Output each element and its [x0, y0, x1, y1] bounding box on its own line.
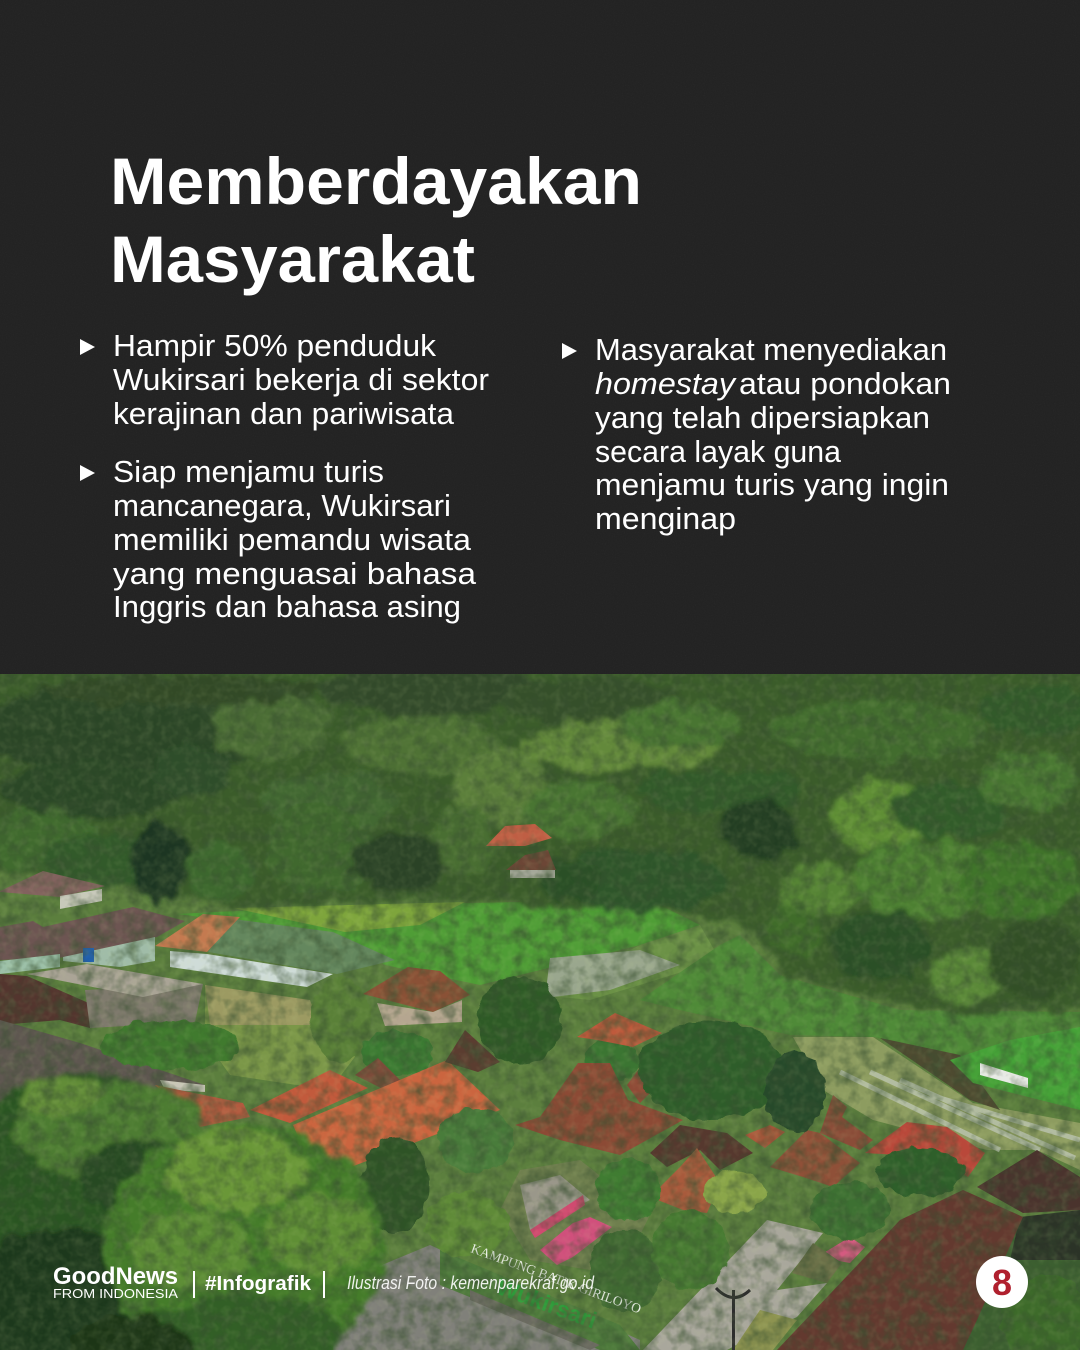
foreground tree canopy: [0, 1070, 385, 1350]
courtyard, walkway and lawns: [333, 1160, 865, 1350]
footer: GoodNews from Indonesia logo: FROM INDONESIA: [53, 1287, 179, 1301]
bullet: homestay: [562, 332, 951, 536]
bullet: tour guides: yang menguasai bahasa: [113, 556, 477, 591]
bullet: homestay: Masyarakat menyediakan: [595, 332, 947, 367]
title: [110, 144, 642, 296]
title: Masyarakat: [110, 222, 475, 296]
title: Memberdayakan: [110, 144, 642, 218]
sign and white banner in field: [980, 1063, 1028, 1088]
bullet: tour guides: Siap menjamu turis: [113, 454, 384, 489]
photo credit: Ilustrasi Foto : kemenparekraf.go.id: [347, 1273, 595, 1293]
bullet: homestay: menginap: [595, 501, 736, 536]
bullet: homestay: yang telah dipersiapkan: [595, 400, 930, 435]
fields and ground: [0, 869, 1080, 1350]
clay-tiled roofs: [155, 967, 985, 1213]
bullet: homestay: menjamu turis yang ingin: [595, 467, 949, 502]
sign lettering: KAMPUNG BATIK GIRILOYO: [469, 1241, 643, 1316]
green-roofed school building: [155, 914, 395, 987]
bullet: homestay: homestay: [595, 366, 738, 401]
bullet: tour guides: [80, 454, 477, 624]
bullet: employment share: Hampir 50% penduduk: [113, 328, 437, 363]
lamp post: [716, 1288, 750, 1350]
mid-ground trees and plants: [100, 976, 640, 1080]
bullet: employment share: kerajinan dan pariwisata: [113, 396, 455, 431]
footer: GoodNews from Indonesia logo: GoodNews: [53, 1263, 178, 1290]
page number badge: 8: [992, 1262, 1012, 1303]
hillside huts: [486, 824, 556, 878]
bullet: tour guides: mancanegara, Wukirsari: [113, 488, 451, 523]
bullet: homestay: atau pondokan: [739, 366, 951, 401]
large brown roofs on the right: [777, 1150, 1080, 1350]
page number badge: [976, 1256, 1028, 1308]
bullet: homestay: secara layak guna: [595, 434, 842, 469]
foliage and tile texture: [0, 674, 1080, 1350]
aerial photo of the village: [0, 650, 1080, 1350]
footer divider and hashtag: #Infografik: [205, 1273, 312, 1295]
bullet: tour guides: Inggris dan bahasa asing: [113, 589, 461, 624]
left village buildings: [0, 871, 205, 1115]
forest hillside: [0, 650, 1080, 1014]
courtyard trees: [361, 1020, 1080, 1350]
bullet: tour guides: memiliki pemandu wisata: [113, 522, 472, 557]
bullet: employment share: [80, 328, 489, 431]
dark textured background panel: [0, 0, 1080, 674]
sign lettering: Wukirsari: [493, 1273, 600, 1333]
bullet: employment share: Wukirsari bekerja di sektor: [113, 362, 489, 397]
footer divider and hashtag: [193, 1271, 325, 1298]
